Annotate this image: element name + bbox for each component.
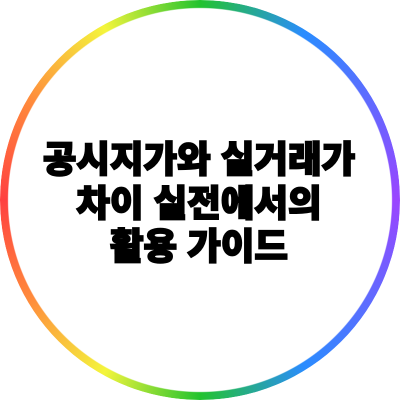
title: 차이 실전에서의 <box>76 182 322 224</box>
title: 공시지가와 실거래가 <box>43 139 355 180</box>
title <box>43 139 356 267</box>
title: 활용 가이드 <box>110 226 288 267</box>
